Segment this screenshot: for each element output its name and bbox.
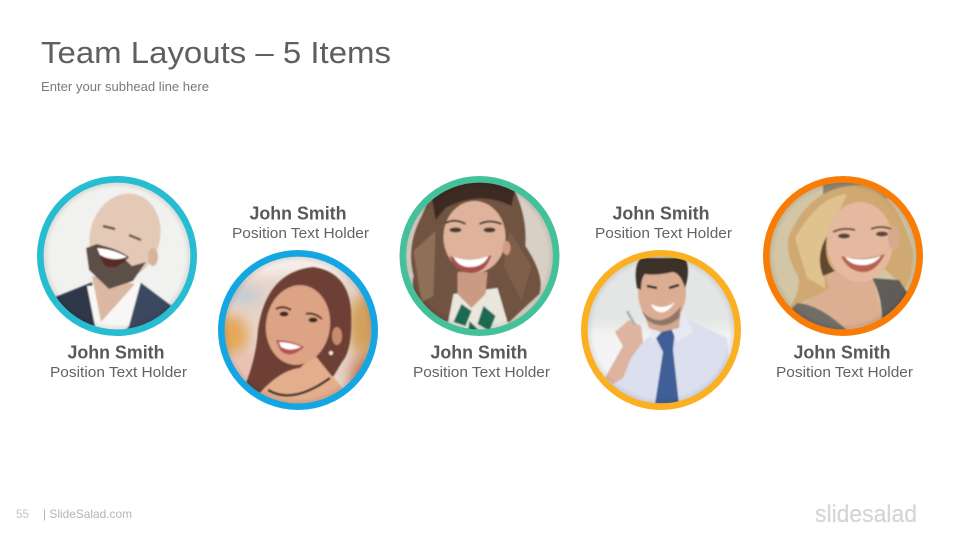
- footer source: | SlideSalad.com: [43, 507, 132, 521]
- team member 3 portrait: [400, 176, 560, 336]
- team member 4 portrait: [581, 250, 741, 410]
- team member 2 position: Position Text Holder: [232, 225, 369, 242]
- team member 1 portrait: [37, 176, 197, 336]
- subhead: Enter your subhead line here: [41, 80, 209, 94]
- team member 3 position: Position Text Holder: [413, 364, 550, 381]
- team member 2 portrait: [216, 250, 378, 410]
- team member 5 position: Position Text Holder: [776, 364, 913, 381]
- team member 1 position: Position Text Holder: [50, 364, 187, 381]
- team member 4 name: John Smith: [612, 204, 710, 224]
- team member 5 name: John Smith: [794, 342, 890, 362]
- page number: 55: [16, 507, 29, 521]
- team member 1 name: John Smith: [68, 342, 164, 362]
- team member 5 portrait: [763, 176, 923, 336]
- team member 3 name: John Smith: [430, 342, 528, 362]
- title: Team Layouts – 5 Items: [41, 35, 391, 70]
- team member 4 position: Position Text Holder: [595, 225, 732, 242]
- team member 2 name: John Smith: [250, 204, 346, 224]
- brand logo: slidesalad: [815, 501, 917, 528]
